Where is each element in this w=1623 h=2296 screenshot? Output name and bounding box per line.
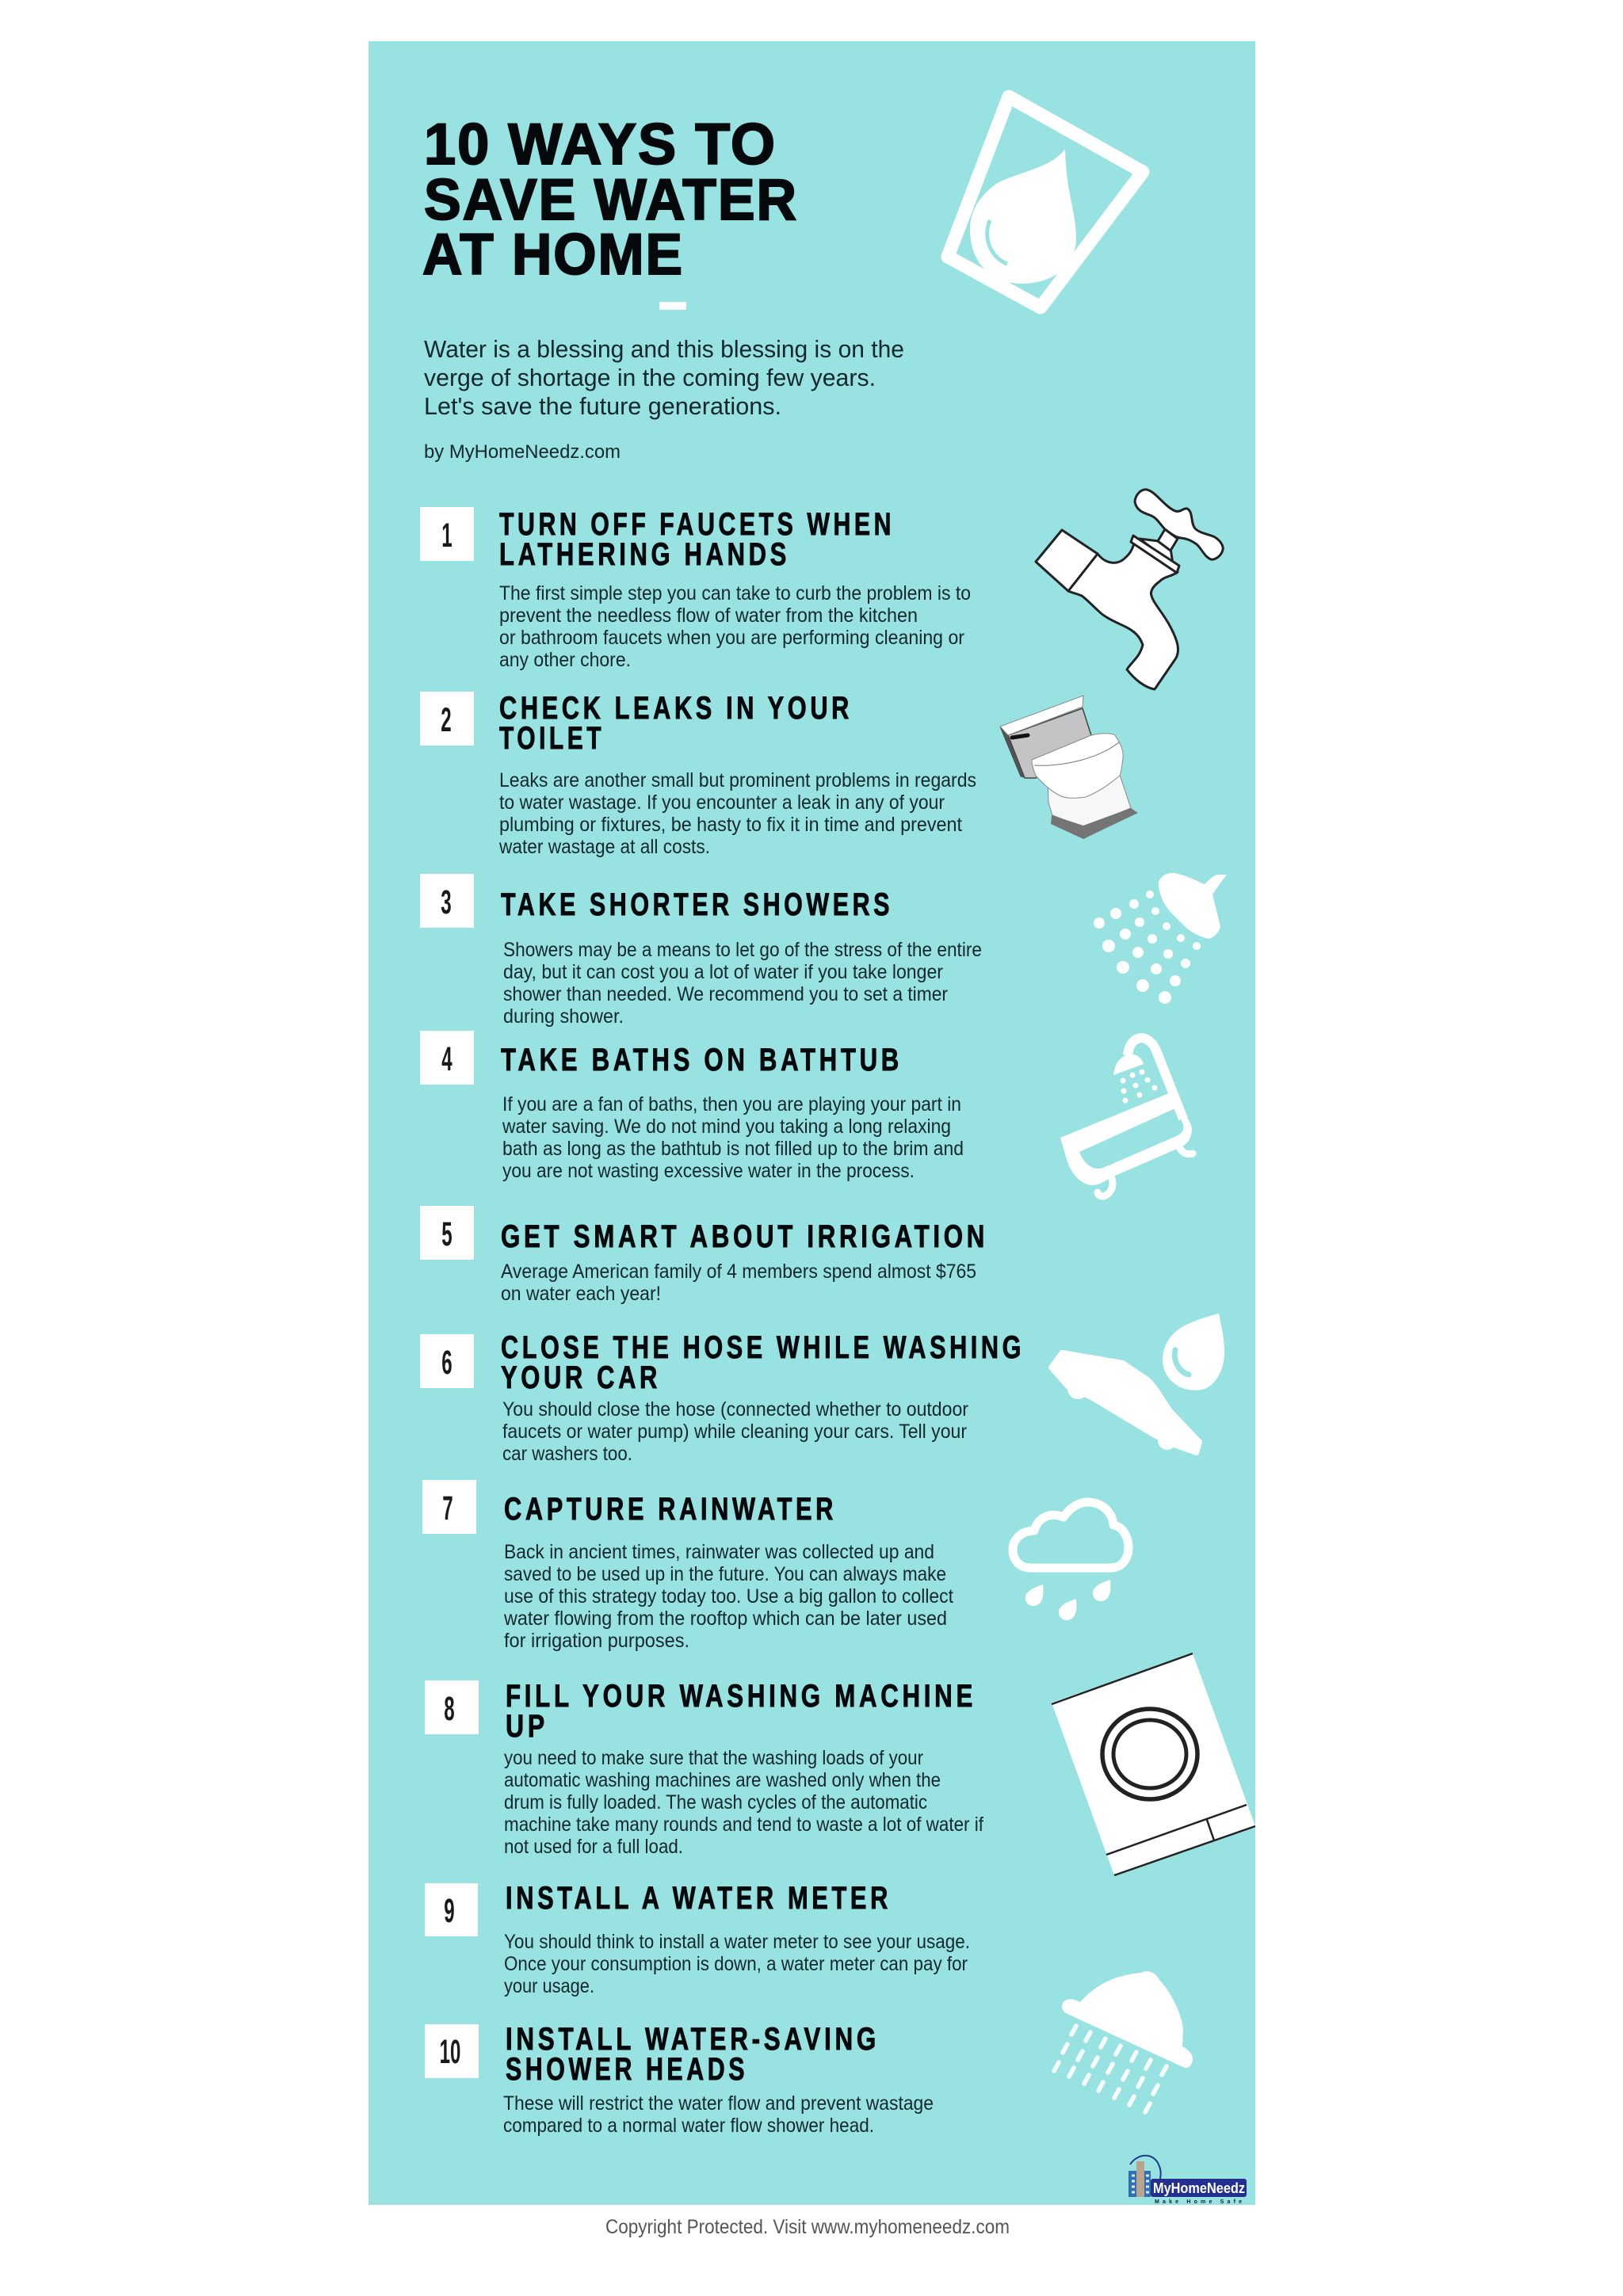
icon: rain cloud: [1013, 1502, 1128, 1620]
heading 8: FILL YOUR WASHING MACHINE: [506, 1679, 976, 1714]
number badge 8: 8: [444, 1690, 455, 1728]
heading 2: [499, 691, 853, 756]
body 6: faucets or water pump) while cleaning your cars. Tell your: [502, 1421, 967, 1443]
body 3: shower than needed. We recommend you to set a timer: [503, 983, 948, 1005]
body 5: on water each year!: [501, 1283, 661, 1305]
number badge 9: [425, 1883, 478, 1936]
icon: shower head with droplets: [1094, 873, 1227, 1004]
body 1: any other chore.: [499, 649, 631, 671]
tip 6: [420, 1330, 1025, 1465]
body 1: prevent the needless flow of water from the kitchen: [499, 605, 918, 627]
body 6: [502, 1398, 968, 1465]
tip 9: [425, 1881, 970, 1997]
body 4: bath as long as the bathtub is not filled up to the brim and: [502, 1138, 964, 1160]
title: SAVE WATER: [424, 168, 798, 232]
number badge 7: [422, 1480, 476, 1534]
number badge 5: [420, 1206, 474, 1260]
number badge 2: [420, 692, 474, 746]
heading 10: SHOWER HEADS: [506, 2052, 748, 2087]
body 8: you need to make sure that the washing loads of your: [504, 1747, 923, 1769]
tip 8: [425, 1679, 983, 1858]
body 10: [503, 2092, 934, 2137]
heading 10: INSTALL WATER-SAVING: [506, 2022, 880, 2057]
number badge 6: 6: [441, 1344, 453, 1382]
intro text: [424, 335, 904, 420]
body 7: for irrigation purposes.: [504, 1630, 689, 1652]
body 3: Showers may be a means to let go of the stress of the entire: [503, 939, 982, 961]
body 2: Leaks are another small but prominent problems in regards: [499, 769, 976, 791]
heading 1: TURN OFF FAUCETS WHEN: [499, 507, 895, 542]
title: AT HOME: [422, 223, 684, 287]
copyright footer: Copyright Protected. Visit www.myhomeneedz.com: [605, 2216, 1010, 2238]
number badge 10: [425, 2024, 479, 2078]
body 6: car washers too.: [502, 1443, 632, 1465]
body 1: The first simple step you can take to curb the problem is to: [499, 582, 971, 605]
number badge 9: 9: [444, 1892, 455, 1930]
body 1: [499, 582, 971, 671]
number badge 6: [420, 1334, 474, 1388]
body 8: drum is fully loaded. The wash cycles of the automatic: [504, 1791, 927, 1814]
intro text: Water is a blessing and this blessing is on the: [424, 335, 904, 363]
body 8: automatic washing machines are washed only when the: [504, 1769, 941, 1791]
number badge 3: [420, 874, 474, 928]
body 1: or bathroom faucets when you are performing cleaning or: [499, 627, 964, 649]
icon: faucet: [1036, 490, 1223, 689]
heading 9: INSTALL A WATER METER: [506, 1881, 892, 1916]
heading 3: TAKE SHORTER SHOWERS: [501, 887, 893, 922]
body 8: not used for a full load.: [504, 1836, 683, 1858]
body 9: [504, 1931, 970, 1997]
body 7: water flowing from the rooftop which can be later used: [503, 1608, 947, 1630]
body 5: Average American family of 4 members spend almost $765: [501, 1261, 976, 1283]
number badge 2: 2: [441, 701, 452, 739]
body 9: Once your consumption is down, a water meter can pay for: [504, 1953, 968, 1975]
icon: water-saving shower head: [1054, 1971, 1193, 2112]
tip 5: [420, 1206, 988, 1305]
body 5: [501, 1261, 976, 1305]
heading 5: GET SMART ABOUT IRRIGATION: [501, 1219, 988, 1254]
body 3: [503, 939, 982, 1028]
title accent dash: [659, 302, 686, 310]
body 7: [503, 1541, 953, 1652]
heading 10: [506, 2022, 880, 2087]
heading 8: [506, 1679, 976, 1744]
number badge 1: 1: [441, 517, 453, 555]
number badge 10: 10: [440, 2033, 460, 2071]
heading 2: CHECK LEAKS IN YOUR: [499, 691, 853, 726]
body 9: You should think to install a water meter to see your usage.: [504, 1931, 970, 1953]
number badge 3: 3: [441, 883, 452, 921]
body 4: water saving. We do not mind you taking a long relaxing: [502, 1116, 951, 1138]
icon: car and water drop: [1051, 1314, 1224, 1453]
heading 6: YOUR CAR: [501, 1360, 661, 1395]
byline: by MyHomeNeedz.com: [424, 441, 621, 463]
intro text: verge of shortage in the coming few years.: [424, 364, 876, 391]
logo: MyHomeNeedz: Make Home Safe: [1155, 2199, 1242, 2205]
title: [422, 113, 798, 287]
background panel: [369, 41, 1255, 2205]
body 3: during shower.: [503, 1005, 624, 1028]
tip 2: [420, 691, 976, 858]
tip 1: [420, 507, 971, 671]
icon: washing machine: [1052, 1653, 1255, 1875]
icon: bathtub: [1060, 1038, 1193, 1196]
logo: MyHomeNeedz: [1128, 2156, 1247, 2205]
heading 1: [499, 507, 895, 572]
body 4: [502, 1093, 964, 1182]
title: 10 WAYS TO: [424, 113, 777, 177]
body 7: saved to be used up in the future. You can always make: [504, 1563, 946, 1585]
body 6: You should close the hose (connected whether to outdoor: [502, 1398, 968, 1421]
icon: water glass with drop: [948, 97, 1143, 307]
icon: toilet: [1000, 696, 1138, 839]
heading 6: CLOSE THE HOSE WHILE WASHING: [501, 1330, 1025, 1365]
intro text: Let's save the future generations.: [424, 392, 781, 420]
body 10: These will restrict the water flow and prevent wastage: [503, 2092, 934, 2115]
heading 2: TOILET: [499, 721, 605, 756]
number badge 4: [420, 1031, 474, 1085]
body 4: you are not wasting excessive water in the process.: [502, 1160, 915, 1182]
number badge 1: [420, 507, 474, 561]
body 3: day, but it can cost you a lot of water if you take longer: [503, 961, 943, 983]
heading 4: TAKE BATHS ON BATHTUB: [501, 1043, 903, 1077]
body 7: Back in ancient times, rainwater was collected up and: [504, 1541, 934, 1563]
body 2: to water wastage. If you encounter a leak in any of your: [499, 791, 945, 814]
number badge 4: 4: [441, 1040, 453, 1078]
heading 6: [501, 1330, 1025, 1395]
body 8: [504, 1747, 983, 1858]
body 4: If you are a fan of baths, then you are playing your part in: [502, 1093, 961, 1116]
heading 8: UP: [506, 1709, 548, 1744]
body 9: your usage.: [504, 1975, 594, 1997]
heading 1: LATHERING HANDS: [499, 537, 790, 572]
body 10: compared to a normal water flow shower head.: [503, 2115, 874, 2137]
number badge 5: 5: [441, 1215, 453, 1253]
tip 7: [422, 1480, 953, 1652]
number badge 8: [425, 1680, 479, 1734]
tip 3: [420, 874, 982, 1028]
tip 10: [425, 2022, 934, 2137]
body 2: [498, 769, 976, 858]
body 8: machine take many rounds and tend to waste a lot of water if: [504, 1814, 983, 1836]
body 2: plumbing or fixtures, be hasty to fix it in time and prevent: [499, 814, 962, 836]
logo: MyHomeNeedz: MyHomeNeedz: [1153, 2180, 1245, 2196]
number badge 7: 7: [442, 1489, 453, 1527]
tip 4: [420, 1031, 964, 1182]
body 7: use of this strategy today too. Use a big gallon to collect: [504, 1585, 953, 1608]
body 2: water wastage at all costs.: [498, 836, 710, 858]
heading 7: CAPTURE RAINWATER: [504, 1492, 837, 1527]
